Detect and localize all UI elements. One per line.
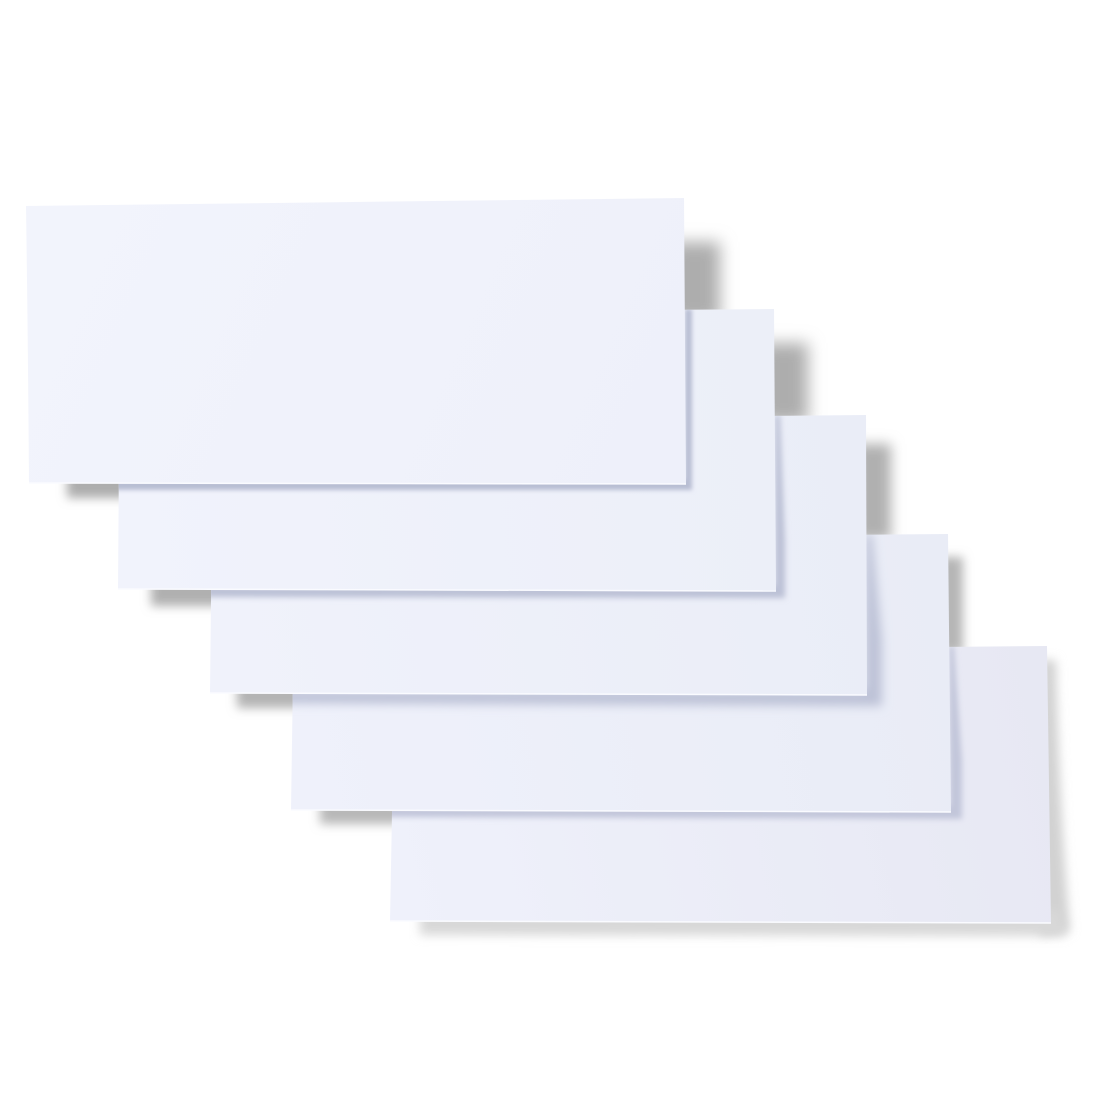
contact shadow of sheet 4 on sheet 5 xyxy=(370,646,962,819)
sheet 1 (top) xyxy=(26,198,686,484)
contact shadow of sheet 1 on sheet 2 xyxy=(100,309,692,490)
sheet 2 xyxy=(100,309,776,591)
cast shadows on the white background xyxy=(67,242,1070,936)
sheet 3 xyxy=(200,415,867,695)
contact shadow of sheet 3 on sheet 4 xyxy=(292,535,886,710)
photo: fanned stack of five white sheets xyxy=(26,198,1074,942)
contact shadow of sheet 2 on sheet 3 xyxy=(200,415,785,598)
sheet 4 xyxy=(291,534,951,813)
sheet 5 (bottom) xyxy=(370,646,1051,923)
